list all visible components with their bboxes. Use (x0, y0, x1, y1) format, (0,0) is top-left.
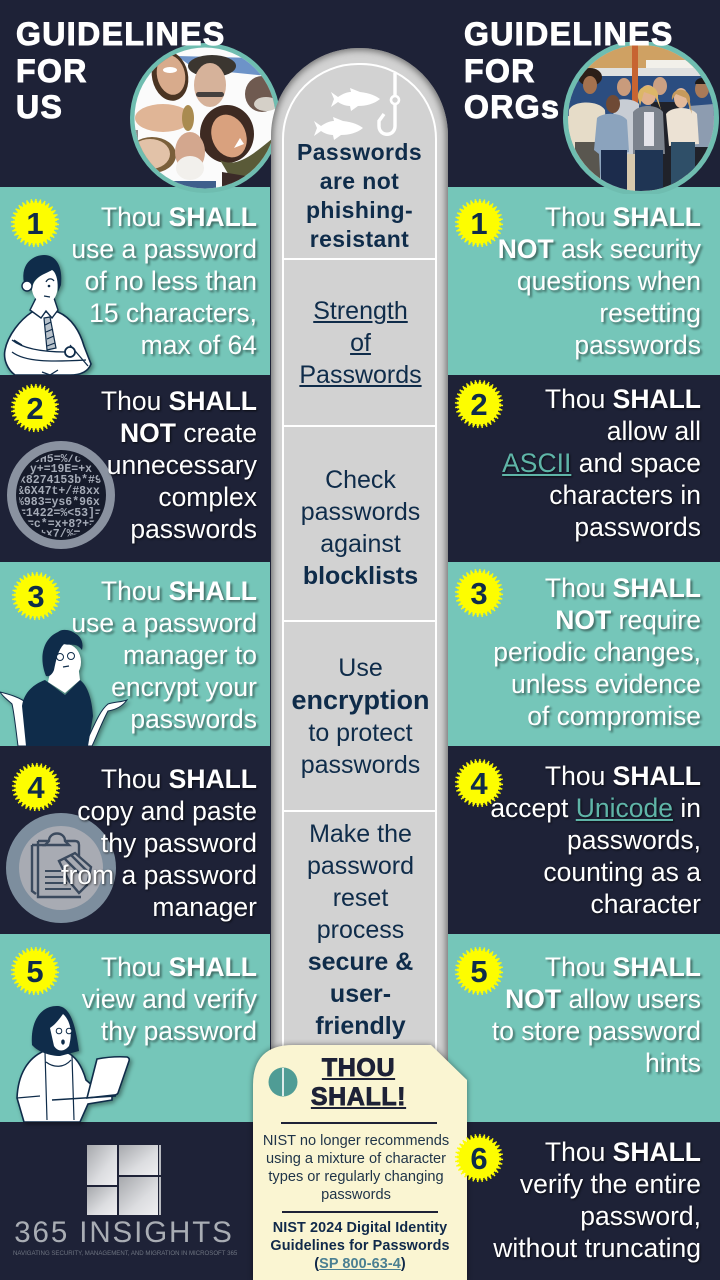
text: phishing resistant (297, 139, 422, 252)
text: rule 3: manager to (123, 640, 257, 670)
badge: number 2 (10, 384, 60, 432)
tag divider top (281, 1122, 437, 1124)
text: org rule 2 (502, 384, 702, 543)
text: rule 2: unnecessary (107, 450, 257, 480)
tag reference: NIST 2024 Digital Identity (273, 1220, 447, 1236)
text: org rule 6: Thou SHALL (545, 1137, 701, 1167)
text: phishing resistant: are not (320, 168, 399, 194)
tag body text: using a mixture of character (266, 1151, 446, 1167)
tag body text: NIST no longer recommends (263, 1133, 449, 1149)
text: rule 1 (71, 202, 260, 360)
text: rule 3: encrypt your (111, 672, 257, 702)
text: check blocklists (301, 466, 420, 590)
text: org rule 3 (493, 573, 704, 734)
text: rule 3: Thou SHALL (101, 576, 257, 606)
heading: guidelines for orgs: GUIDELINES (464, 16, 674, 52)
text: rule 4: from a password (61, 860, 257, 890)
tablet inner outline (282, 63, 437, 1280)
text: org rule 3: of compromise (527, 701, 701, 731)
text: org rule 1: Thou SHALL (545, 202, 701, 232)
badge: number 2 (454, 380, 504, 428)
badge: number 4: 4 (470, 766, 488, 801)
tag shape (250, 1041, 470, 1280)
text: rule 2: passwords (130, 514, 257, 544)
text: rule 4: manager (152, 892, 257, 922)
text: org rule 4 (490, 761, 702, 919)
icon: circle of password characters: cH5=%/c (33, 453, 81, 466)
text: org rule 1 (498, 202, 704, 362)
icon: circle of password characters: x8274153b*#9 (19, 474, 102, 487)
badge: number 1: 1 (26, 206, 44, 241)
tag heading: SHALL! (311, 1083, 406, 1111)
tag heading: THOU (322, 1054, 395, 1082)
panel: left row 1 (0, 187, 270, 375)
text: password reset: process (317, 916, 404, 944)
tag body text (263, 1133, 449, 1203)
text: strength of passwords (299, 297, 422, 389)
badge: number 5 (454, 946, 504, 996)
text: rule 1: Thou SHALL (101, 202, 257, 232)
text: check blocklists: blocklists (303, 562, 418, 590)
badge: number 4 (454, 758, 504, 808)
heading: guidelines for us: GUIDELINES (16, 16, 226, 52)
text: rule 3: use a password (71, 608, 257, 638)
text: rule 4: thy password (101, 828, 257, 858)
icon: circle of password characters: %983=ys6*96x (17, 496, 100, 509)
heading: guidelines for us: FOR (16, 52, 88, 88)
heading: guidelines for orgs (464, 16, 674, 125)
text: password reset: secure & (308, 948, 413, 976)
text: rule 4 (61, 764, 258, 924)
text: check blocklists: against (320, 530, 401, 558)
text: password reset: reset (333, 884, 388, 912)
text: org rule 2: allow all (607, 416, 701, 446)
text: password reset: password (307, 852, 414, 880)
heading: guidelines for us: US (16, 89, 63, 125)
text: phishing resistant: resistant (310, 226, 409, 252)
badge: number 5: 5 (26, 954, 44, 989)
text: org rule 4: counting as a (543, 857, 701, 887)
panel: left row 4 (0, 746, 270, 934)
text: org rule 2: ASCII and space (502, 448, 701, 478)
text: org rule 1: questions when (517, 266, 701, 296)
icon: circle of password characters: &6X47t+/#8xx (17, 485, 100, 498)
panel: right row 3 (448, 562, 720, 746)
text: org rule 4: accept Unicode in (490, 793, 701, 823)
badge: number 1: 1 (470, 206, 488, 241)
text: check blocklists: Check (325, 466, 396, 494)
text: org rule 1: NOT ask security (498, 234, 701, 264)
text: rule 1: 15 characters, (89, 298, 257, 328)
badge: number 3 (12, 572, 60, 620)
logo wordmark: 365 INSIGHTS (14, 1216, 234, 1249)
text: password reset: user- (330, 980, 391, 1008)
icon: fish and hook (314, 73, 400, 140)
text: password reset: Make the (309, 820, 412, 848)
text: password reset (307, 820, 414, 1040)
tag body text: types or regularly changing (268, 1169, 444, 1185)
text: org rule 2: passwords (574, 512, 701, 542)
panel: right row 1 (448, 187, 720, 375)
text: org rule 5: hints (645, 1048, 701, 1078)
badge: number 4 (12, 762, 60, 812)
text: org rule 6: verify the entire (520, 1169, 701, 1199)
text: org rule 4: passwords, (567, 825, 701, 855)
tag body text: passwords (321, 1187, 391, 1203)
heading: guidelines for orgs: FOR (464, 52, 536, 88)
panel: left row 3 (0, 562, 270, 746)
text: org rule 1: passwords (574, 330, 701, 360)
text: org rule 3: NOT require (555, 605, 701, 635)
panel: left row 2 (7, 375, 258, 549)
illustration: shrugging person (0, 630, 130, 746)
badge: number 4: 4 (27, 770, 45, 805)
text: password reset: friendly (315, 1012, 406, 1040)
logo: 365 Insights (13, 1145, 237, 1257)
badge: number 1 (10, 198, 60, 248)
text: org rule 3: unless evidence (511, 669, 701, 699)
panel: left row 5 (0, 934, 270, 1122)
text: strength of passwords: Passwords (299, 361, 422, 389)
photo: circle of diverse faces (130, 43, 278, 193)
text: org rule 5: NOT allow users (505, 984, 701, 1014)
badge: number 5 (10, 946, 60, 996)
text: rule 2: complex (158, 482, 257, 512)
panel: right row 4 (448, 746, 720, 934)
icon: circle of password characters: =1422=%<53]= (19, 507, 102, 520)
panel: right row 2 (448, 375, 720, 562)
callout: thou shall tag (250, 1041, 470, 1280)
tag hole (268, 1068, 298, 1096)
text: phishing resistant: Passwords (297, 139, 422, 165)
tag reference: (SP 800-63-4) (314, 1256, 406, 1272)
icon: circle of password characters: +x7/%= (39, 528, 81, 541)
text: rule 5: view and verify (82, 984, 257, 1014)
text: use encryption: Use (338, 654, 383, 682)
text: use encryption: passwords (301, 751, 420, 779)
text: strength of passwords: of (350, 329, 371, 357)
illustration: person with laptop (16, 1006, 134, 1124)
heading: guidelines for us (16, 16, 226, 125)
text: rule 5: Thou SHALL (101, 952, 257, 982)
text: rule 2: NOT create (120, 418, 257, 448)
text: rule 2 (101, 386, 258, 545)
text: rule 3 (71, 576, 260, 736)
text: rule 5 (82, 952, 260, 1049)
badge: number 6 (452, 1131, 506, 1185)
text: org rule 2: Thou SHALL (545, 384, 701, 414)
icon: circle of password characters: =c*=x+8?+= (27, 518, 96, 531)
text: rule 4: Thou SHALL (101, 764, 257, 794)
text: org rule 6 (493, 1137, 702, 1264)
text: use encryption: to protect (308, 719, 413, 747)
text: org rule 3: Thou SHALL (545, 573, 701, 603)
photo: team of colleagues (563, 42, 719, 194)
panel: dark row 6 background (467, 1122, 720, 1280)
text: check blocklists: passwords (301, 498, 420, 526)
text: rule 1: use a password (71, 234, 257, 264)
logo tagline: NAVIGATING SECURITY, MANAGEMENT, AND MIGRATION IN MICROSOFT 365 (13, 1250, 237, 1257)
text: org rule 4: character (591, 889, 701, 919)
text: rule 4: copy and paste (77, 796, 257, 826)
badge: number 5: 5 (470, 954, 488, 989)
text: phishing resistant: phishing- (306, 197, 413, 223)
logo mark (87, 1145, 161, 1215)
tag divider bottom (282, 1211, 438, 1213)
badge: number 3 (454, 568, 504, 618)
badge: number 3: 3 (27, 579, 45, 614)
text: strength of passwords: Strength (313, 297, 408, 325)
text: org rule 6: without truncating (493, 1233, 701, 1263)
text: use encryption: encryption (291, 685, 430, 715)
panel: right row 5 (448, 934, 720, 1122)
text: rule 1: max of 64 (141, 330, 257, 360)
text: org rule 5 (492, 952, 704, 1078)
badge: number 6: 6 (470, 1141, 488, 1176)
heading: guidelines for orgs: ORGs (464, 89, 560, 125)
text: org rule 4: Thou SHALL (545, 761, 701, 791)
text: rule 2: Thou SHALL (101, 386, 257, 416)
badge: number 2: 2 (470, 387, 488, 422)
icon: circle of password characters (7, 441, 115, 549)
text: org rule 5: Thou SHALL (545, 952, 701, 982)
text: rule 1: of no less than (85, 266, 257, 296)
text: org rule 6: password, (580, 1201, 701, 1231)
illustration: man with crossed arms (3, 254, 96, 375)
badge: number 2: 2 (26, 391, 44, 426)
text: use encryption (291, 654, 430, 779)
text: rule 3: passwords (130, 704, 257, 734)
text: rule 5: thy password (101, 1016, 257, 1046)
badge: number 3: 3 (470, 576, 488, 611)
text: org rule 3: periodic changes, (493, 637, 701, 667)
tag reference: Guidelines for Passwords (270, 1238, 450, 1254)
icon: clipboard copy and paste (6, 813, 116, 923)
tag reference (253, 1219, 467, 1273)
panel: central tablet (271, 48, 448, 1280)
text: org rule 1: resetting (599, 298, 701, 328)
text: org rule 5: to store password (492, 1016, 701, 1046)
icon: circle of password characters: *y+=19E=+x (23, 463, 92, 476)
badge: number 1 (454, 198, 504, 248)
tag heading (310, 1054, 406, 1111)
text: org rule 2: characters in (549, 480, 701, 510)
